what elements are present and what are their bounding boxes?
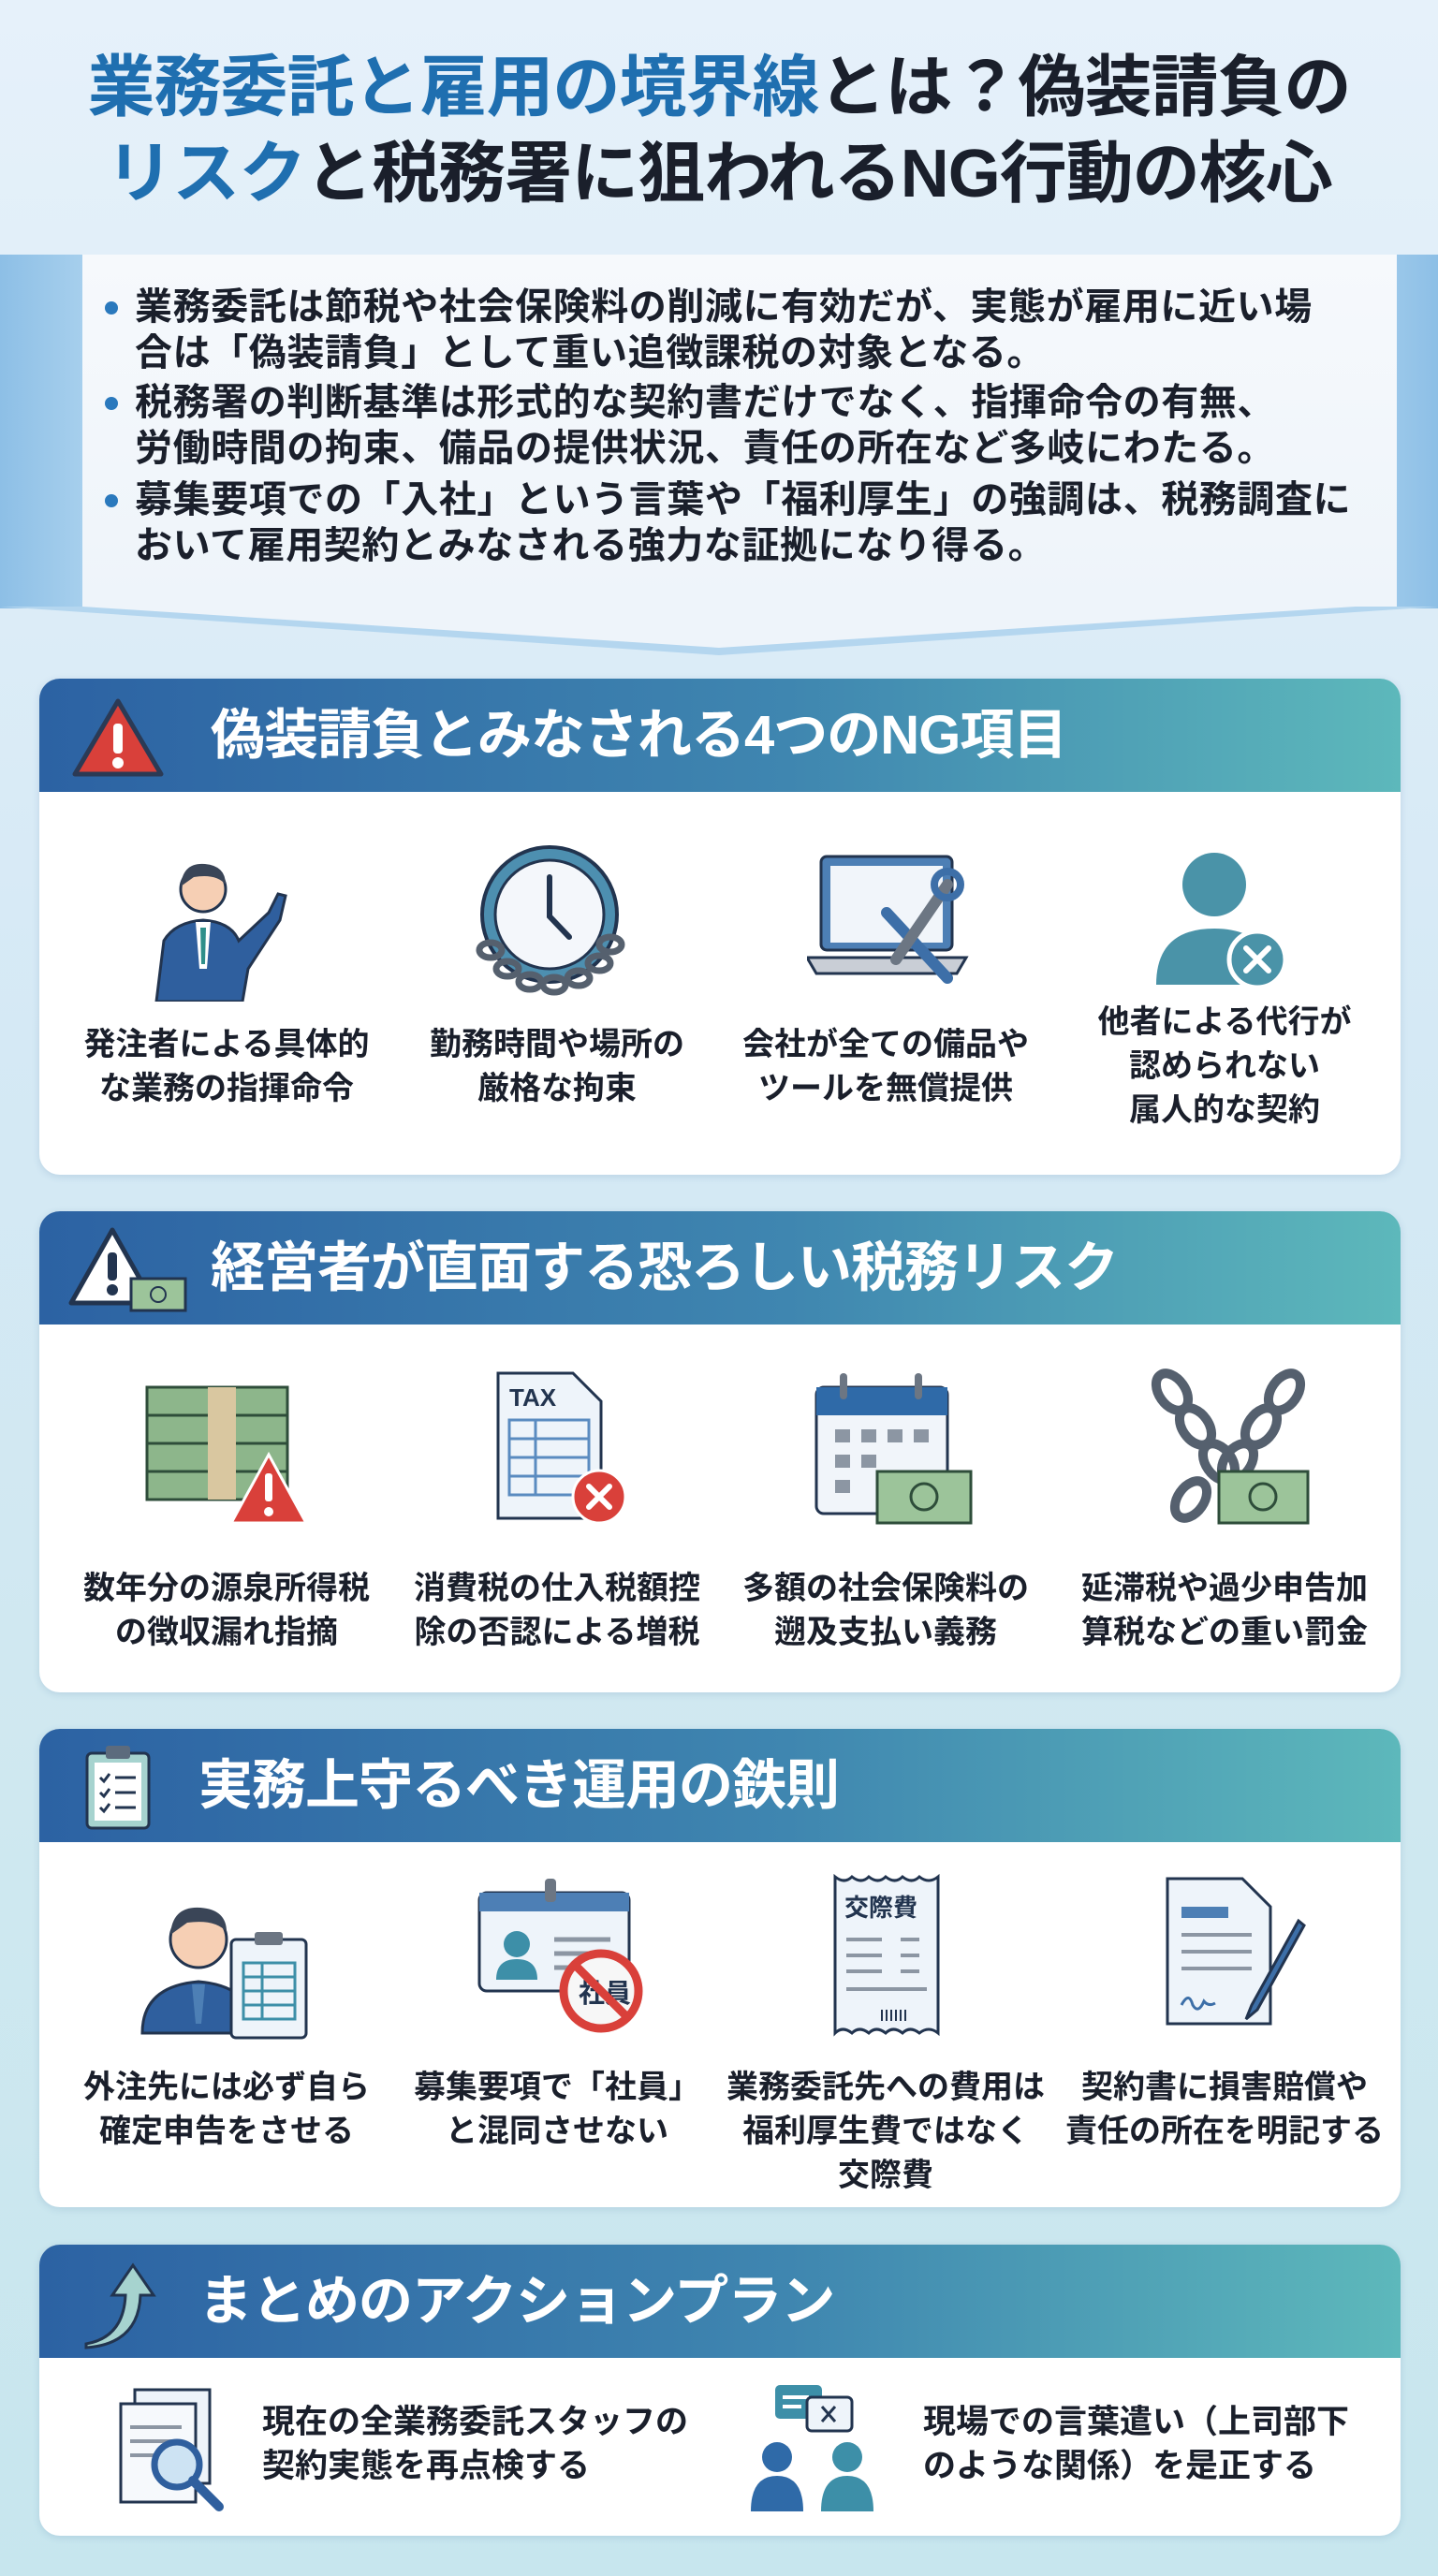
- text: action 2: 現場での言葉遣い（上司部下: [923, 2404, 1349, 2440]
- label: risk 1: の徴収漏れ指摘: [115, 1615, 338, 1650]
- label: rule 4: 責任の所在を明記する: [1065, 2114, 1384, 2149]
- label: NG 4: [1097, 1004, 1351, 1128]
- icon: warning: [73, 698, 163, 777]
- title: 業務委託と雇用の境界線とは？偽装請負の: [87, 51, 1351, 125]
- header: action plan: まとめのアクションプラン: [198, 2271, 834, 2332]
- label: rule 3: [726, 2070, 1045, 2193]
- icon: documents magnifier: [120, 2389, 224, 2511]
- bullet 1: [135, 285, 1380, 376]
- panel: rules: [39, 1729, 1401, 2207]
- icon: up arrow: [84, 2263, 156, 2349]
- label: NG 4: 認められない: [1129, 1048, 1320, 1084]
- header: NG items: 偽装請負とみなされる4つのNG項目: [211, 705, 1066, 766]
- bullet 2: [135, 380, 1380, 472]
- label: rule 3: 福利厚生費ではなく: [742, 2114, 1029, 2149]
- header: NG items: [39, 679, 1401, 792]
- label: NG 2: 厳格な拘束: [477, 1071, 637, 1106]
- bullet 1: 合は「偽装請負」として重い追徴課税の対象となる。: [135, 332, 1045, 373]
- label: risk 4: 算税などの重い罰金: [1081, 1615, 1368, 1650]
- icon: contract with pen: [1167, 1878, 1306, 2026]
- label: rule 3: 交際費: [838, 2158, 933, 2193]
- label: rule 2: [414, 2070, 700, 2149]
- text: action 1: 契約実態を再点検する: [262, 2448, 590, 2484]
- text: action 1: [262, 2404, 688, 2484]
- label: risk 2: [414, 1571, 700, 1650]
- icon: two people talking: [751, 2385, 873, 2511]
- label: risk 2: 除の否認による増税: [414, 1615, 699, 1650]
- icon: tax form: TAX: [509, 1383, 557, 1412]
- label: rule 1: [83, 2070, 370, 2149]
- icon: boss pointing: [155, 863, 287, 1002]
- text: action 2: [923, 2404, 1349, 2484]
- label: NG 3: ツールを無償提供: [758, 1071, 1013, 1106]
- label: risk 1: [83, 1571, 370, 1650]
- label: NG 1: 発注者による具体的: [84, 1027, 369, 1062]
- icon: ID card no employee: [477, 1879, 642, 2033]
- header: rules: 実務上守るべき運用の鉄則: [198, 1755, 839, 1816]
- icon: clock with chain: [476, 845, 625, 996]
- label: rule 2: と混同させない: [446, 2114, 668, 2149]
- label: NG 3: [742, 1027, 1029, 1106]
- label: NG 2: 勤務時間や場所の: [430, 1027, 684, 1062]
- bullet 3: 募集要項での「入社」という言葉や「福利厚生」の強調は、税務調査に: [135, 479, 1351, 520]
- icon: warning with money: [69, 1228, 187, 1312]
- label: NG 2: [430, 1027, 684, 1106]
- chevron arrow: [2, 607, 1436, 655]
- panel: tax risks: [39, 1211, 1401, 1692]
- label: risk 3: [742, 1571, 1029, 1650]
- label: NG 1: な業務の指揮命令: [99, 1071, 354, 1106]
- bullet 1: 業務委託は節税や社会保険料の削減に有効だが、実態が雇用に近い場: [135, 286, 1313, 328]
- icon: chains and cash: [1152, 1368, 1309, 1524]
- label: rule 4: [1065, 2070, 1384, 2149]
- label: NG 1: [84, 1027, 369, 1106]
- bullet 2: 税務署の判断基準は形式的な契約書だけでなく、指揮命令の有無、: [135, 382, 1275, 423]
- label: NG 4: 属人的な契約: [1129, 1092, 1320, 1128]
- icon: calendar and cash: [814, 1373, 972, 1524]
- header: rules: [39, 1729, 1401, 1842]
- label: risk 4: [1081, 1571, 1368, 1650]
- label: NG 3: 会社が全ての備品や: [742, 1027, 1029, 1062]
- icon: receipt: 交際費: [844, 1889, 917, 1924]
- label: rule 4: 契約書に損害賠償や: [1081, 2070, 1368, 2105]
- bullet 2: 労働時間の拘束、備品の提供状況、責任の所在など多岐にわたる。: [135, 428, 1275, 469]
- icon: person with x: [1156, 853, 1283, 985]
- label: risk 4: 延滞税や過少申告加: [1081, 1571, 1368, 1606]
- label: rule 2: 募集要項で「社員」: [414, 2070, 700, 2105]
- title: リスクと税務署に狙われるNG行動の核心: [106, 137, 1332, 212]
- text: action 1: 現在の全業務委託スタッフの: [262, 2404, 688, 2440]
- label: rule 1: 確定申告をさせる: [99, 2114, 354, 2149]
- icon: receipt: [833, 1874, 940, 2037]
- icon: ID card no employee: 社員: [579, 1973, 631, 2011]
- summary band: [0, 255, 1438, 608]
- header: tax risks: 経営者が直面する恐ろしい税務リスク: [211, 1237, 1118, 1298]
- label: rule 3: 業務委託先への費用は: [726, 2070, 1045, 2105]
- label: risk 2: 消費税の仕入税額控: [414, 1571, 700, 1606]
- header: action plan: [39, 2245, 1401, 2358]
- icon: money stack: [146, 1385, 303, 1522]
- label: NG 4: 他者による代行が: [1097, 1004, 1351, 1040]
- label: risk 3: 多額の社会保険料の: [742, 1571, 1029, 1606]
- icon: clipboard: [86, 1746, 150, 1829]
- summary box: [82, 255, 1397, 608]
- header: tax risks: [39, 1211, 1401, 1325]
- panel: NG items: [39, 679, 1401, 1175]
- label: risk 1: 数年分の源泉所得税: [83, 1571, 370, 1606]
- bullet 3: おいて雇用契約とみなされる強力な証拠になり得る。: [135, 525, 1046, 566]
- icon: person with form: [140, 1908, 307, 2039]
- bullet 3: [135, 477, 1380, 569]
- text: action 2: のような関係）を是正する: [923, 2448, 1316, 2484]
- label: rule 1: 外注先には必ず自ら: [83, 2070, 370, 2105]
- panel: action plan: [39, 2245, 1401, 2536]
- icon: tax form: [496, 1372, 624, 1522]
- title: [87, 51, 1351, 212]
- label: risk 3: 遡及支払い義務: [774, 1615, 997, 1650]
- icon: laptop and wrench: [807, 856, 969, 984]
